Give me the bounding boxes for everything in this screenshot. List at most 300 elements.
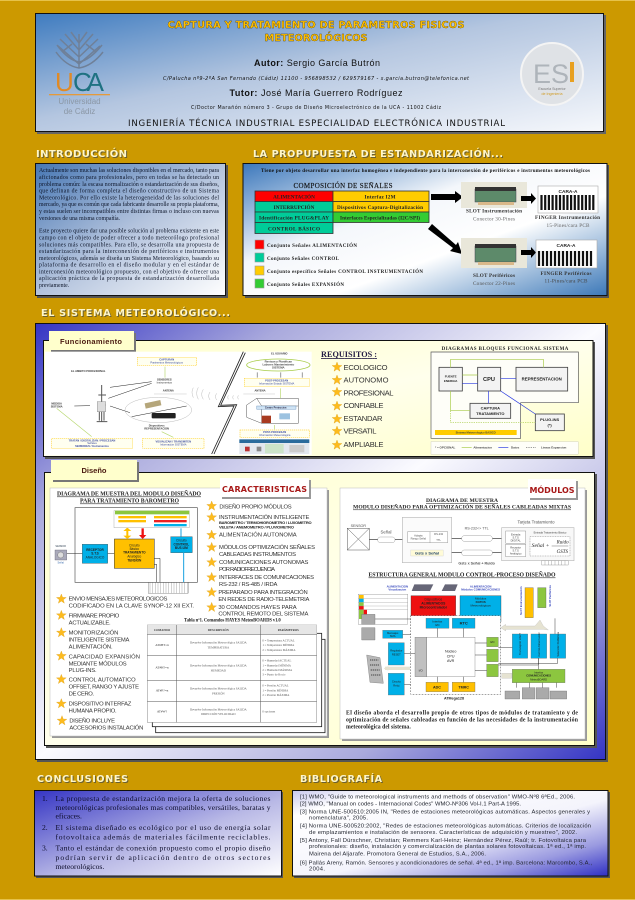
mixed signal diagram: Señal Generada — [411, 545, 443, 550]
signal legend: Conjunto Señales EXPANSIÓN — [267, 282, 344, 288]
barometer heading — [57, 490, 201, 504]
tower and arrows — [97, 385, 107, 422]
panel: bibliografía: [3] Norma UNE-500510:2005 IN, "Redes de estaciones meteorológicas automáticas. Aspectos generales y — [300, 810, 590, 816]
characteristics list: PREPARADO PARA INTEGRACIÓN — [218, 589, 308, 596]
signal composition table: Dispositivos Captura-Digitalización — [337, 205, 423, 211]
table: comandos hayes: 2 = Temperatura MÁXIMA — [262, 647, 296, 652]
barometer diagram: Señal — [57, 562, 64, 565]
diagram: system operation: MEDIDA — [51, 401, 62, 405]
table: comandos hayes: 1 = Humedad MÍNIMA — [262, 662, 292, 667]
title: METEOROLÓGICOS — [264, 31, 368, 44]
callout: características: CARACTERISTICAS — [222, 485, 307, 494]
icon: ESI logo: Escuela Superior — [538, 87, 566, 91]
signal legend — [255, 240, 423, 288]
table: comandos hayes — [147, 618, 325, 733]
connector captions: 15-Pines/cara PCB — [546, 223, 590, 229]
panel: propuesta de estandarización — [243, 164, 609, 298]
panel: funcionamiento — [44, 331, 595, 459]
block diagram: FUENTE — [445, 375, 457, 379]
diagram: system operation: Información Estado SISTEMA — [259, 382, 295, 386]
diagram: control module core: Selección Periféricos — [556, 631, 560, 657]
features list: HUMANA PROPIO. — [69, 709, 117, 715]
author details: C/Doctor Marañón número 3 - Grupo de Diseño Microelectrónico de la UCA - 11002 Cádiz — [191, 104, 441, 111]
table: comandos hayes: 0 = Humedad ACTUAL — [262, 659, 291, 663]
diagram: control module core: Núcleo — [445, 650, 456, 654]
table: comandos hayes: DESCRIPCIÓN — [208, 627, 230, 632]
author details: Autor: Sergio García Butrón — [254, 58, 380, 68]
block diagram: REPRESENTACION — [522, 376, 562, 381]
diagram: system operation: Labores Mantenimiento — [262, 362, 294, 366]
callout: módulos: MÓDULOS — [530, 484, 575, 495]
signal composition table: Identificación PLUG&PLAY — [259, 216, 329, 222]
callout: características — [220, 478, 311, 499]
tab: diseño — [51, 460, 139, 482]
panel: introducción: plataforma de desarrollo en el diseño modular y en el estándar de — [39, 262, 219, 268]
characteristics list — [207, 501, 315, 618]
mixed signal diagram: GSTS — [557, 550, 569, 555]
panel: conclusiones: 2. — [42, 823, 48, 832]
panel: conclusiones: podrían servir de aplicación dentro de otros sectores — [56, 853, 271, 862]
panel: introducción: campo con el objeto de poder ofrecer a todo meteorólogo profesional — [39, 234, 219, 242]
table: comandos hayes: Devuelve Información Meteorológica SALIDA — [190, 641, 248, 645]
mixed signal diagram: Entrada Tratamiento Básico — [534, 531, 567, 535]
panel: bibliografía: [1] WMO, "Guide to meteorological instruments and methods of observation" WMO-Nº8 6ªEd., 2006. — [300, 794, 575, 800]
characteristics list: 30 COMANDOS HAYES PARA — [218, 605, 297, 611]
icon: instrumentation slot — [461, 182, 527, 208]
characteristics list: MÓDULOS OPTIMIZACIÓN SEÑALES — [219, 544, 315, 551]
features list: ALIMENTACIÓN. — [69, 643, 113, 650]
panel: bibliografía — [292, 790, 610, 878]
requisitos list: PROFESIONAL — [344, 388, 394, 398]
arrow: to instrumentation slot — [431, 191, 463, 203]
intro sentence: Tiene por objeto desarrollar una interfaz homogénea e independiente para la interconexión de periféricos e instrumentos meteorológicos — [261, 169, 590, 174]
signal composition table: INTERRUPCIÓN — [274, 203, 315, 211]
title — [168, 20, 464, 44]
arrow: to peripheral slot — [428, 224, 462, 254]
mixed signal diagram: Señal + — [532, 543, 550, 549]
block diagram: CAPTURA — [481, 405, 500, 410]
block diagram: TRATAMIENTO — [476, 411, 505, 416]
degree line: INGENIERÍA TÉCNICA INDUSTRIAL ESPECIALIDAD ELECTRÓNICA INDUSTRIAL — [128, 117, 505, 129]
panel: conclusiones: 3. — [42, 844, 48, 852]
yellow dashed info boxes — [52, 357, 309, 448]
mixed signal diagram: Tarjeta Tratamiento — [517, 520, 555, 525]
panel: bibliografía: Mairena del Aljarafe. Promotora General de Estudios, S.A., 2006. — [309, 852, 486, 858]
module description: El diseño aborda el desarrollo propio de otros tipos de módulos de tratamiento y de — [346, 710, 578, 716]
mixed signal diagram: RS-232<> TTL — [465, 527, 489, 531]
barometer diagram: Circuito — [129, 543, 140, 547]
characteristics list: INSTRUMENTACIÓN INTELIGENTE — [219, 514, 309, 521]
mixed signal diagram: TTL — [436, 538, 442, 542]
diagram: system operation: SISTEMA — [272, 365, 285, 369]
requisitos list: CONFIABLE — [344, 401, 384, 410]
characteristics list: BAROMETRO / TERMOHIGROMETRO / LUXOMETRO — [219, 520, 312, 525]
panel: introducción: versiones de una misma compañía. — [39, 216, 121, 222]
table: comandos hayes: 2 = Presión MÁXIMA — [262, 692, 290, 697]
table: comandos hayes: TEMPERATURA — [207, 645, 230, 649]
features list: ACCESORIOS INSTALACIÓN — [69, 725, 143, 732]
features list: INTELIGENTE SISTEMA — [69, 637, 129, 643]
heading: bibliografía: BIBLIOGRAFÍA — [300, 772, 383, 785]
panel: bibliografía: profesionales: diseño, instalación y comercialización de plantas solares fotovoltaicas. 1ª ed., 1ª imp. — [309, 843, 586, 850]
table: comandos hayes: PRESIÓN — [212, 690, 225, 695]
diagram: control module core: Regulador — [390, 649, 403, 653]
mixed signal diagram: S.T.S — [512, 536, 519, 540]
panel: conclusiones: La propuesta de estandarización mejora la oferta de soluciones — [56, 794, 271, 803]
diagram: control module upper: DATOS — [476, 600, 486, 604]
table: comandos hayes: Devuelve Información Meteorológica SALIDA — [190, 687, 248, 691]
diagram: control module core: COMUNICACIONES — [526, 674, 551, 678]
diagram: control module upper — [358, 584, 552, 626]
panel: introducción: previamente. — [39, 283, 70, 289]
diagram: control module core: CPU — [447, 654, 455, 658]
diagram: control module core: AVR — [447, 659, 455, 663]
mixed signal diagram: RS-232 — [434, 532, 444, 536]
mixed signal diagram — [347, 517, 574, 565]
features list: DE CERO. — [69, 692, 94, 698]
panel: bibliografía: de emplazamientos e instalación de sensores. Características de adquisición y muestreo", 2002. — [309, 830, 577, 836]
panel: bibliografía: [4] Norma UNE-500520:2002, "Redes de estaciones meteorológicas automáticas. Criterios de localización — [300, 824, 591, 830]
diagram: system operation: Información Meteorológica — [259, 433, 291, 437]
signal composition table: COMPOSICIÓN DE SEÑALES — [294, 182, 393, 190]
diagram: control module upper: SLOT Periféricos — [548, 585, 552, 607]
diagram: control module core: Reloj — [393, 683, 400, 687]
table: comandos hayes: HUMEDAD — [211, 668, 227, 672]
panel: diseño — [44, 460, 597, 748]
block diagram: Lineas Expansion — [541, 446, 567, 450]
barometer diagram: SENSOR — [55, 545, 66, 548]
panel: bibliografía: [6] Pallás Areny, Ramón. Sensores y acondicionadores de señal. 4ª ed., 1ª imp. Barcelona: Marcombo, S.A., — [300, 860, 592, 866]
diagram: system operation: SENSORES — [157, 378, 172, 382]
features list: DISEÑO INCLUYE — [69, 718, 115, 725]
table: comandos hayes: AT#H?=n — [155, 666, 169, 670]
signal composition table: Interfaz I2M — [364, 194, 396, 200]
block diagram — [431, 347, 578, 454]
data outputs — [239, 439, 309, 443]
table: comandos hayes: Devuelve Información Meteorológica SALIDA — [190, 707, 248, 711]
módulos heading — [353, 498, 571, 510]
panel: introducción: problema común: la escasa normalización o estandarización de sus diseños, — [39, 182, 220, 188]
barometer diagram: Analógico — [127, 554, 142, 558]
barometer heading: DIAGRAMA DE MUESTRA DEL MODULO DISEÑADO — [57, 490, 201, 498]
mixed signal diagram: Señal — [380, 530, 392, 535]
diagram: system operation: ANTENA — [163, 388, 174, 392]
table: comandos hayes: Tabla nº1. Comandos HAYES MeteoBOARDS v1.0 — [184, 618, 281, 624]
diagram: control module core: RESET — [392, 653, 401, 657]
diagram: system operation: POST-PROCESAN — [263, 430, 286, 434]
panel: introducción: soluciones más compatibles. Para ello, se desarrolla una propuesta de — [39, 242, 219, 248]
icon: UCA logo: Universidad — [58, 97, 101, 106]
characteristics list: VELETA / ANEMOMETRO / PLUVIOMETRO — [219, 525, 294, 530]
panel: conclusiones: El sistema diseñado es ecológico por el uso de energía solar — [56, 823, 271, 832]
characteristics list: COMUNICACIONES AUTONOMAS — [219, 560, 308, 566]
block diagram: Sistema Meteorologico BASICO — [456, 431, 496, 435]
features list — [56, 594, 194, 732]
barometer diagram: TENSION — [127, 559, 142, 563]
diagram: control module upper: ALIMENTACION — [470, 584, 491, 588]
diagram: system operation: VISUALIZAN / TRANSMITEN — [156, 439, 191, 443]
barometer diagram: S.T.S — [91, 552, 99, 556]
diagram: control module upper: Dispositivos — [424, 597, 443, 601]
features list: ENVIO MENSAJES METEOROLOGICOS — [69, 597, 167, 603]
features list: FIRMWARE PROPIO — [69, 613, 120, 619]
table: comandos hayes: DIRECCIÓN VELOCIDAD — [201, 711, 236, 716]
heading: la propuesta: LA PROPUPUESTA DE ESTANDARIZACIÓN... — [253, 147, 503, 160]
panel: sistema meteorológico — [36, 324, 608, 762]
icon: ESI logo — [521, 43, 583, 105]
diagram: control module upper: SLOT Instrumentación — [519, 586, 523, 615]
diagram: system operation: ANTENA — [254, 388, 266, 392]
characteristics list: POR RADIOFRECUENCIA — [219, 567, 275, 573]
characteristics list: RS-232 / RS-485 / IRDA — [219, 582, 277, 588]
módulos heading: MODULO DISEÑADO PARA OPTIMIZACIÓN DE SEÑALES CABLEADAS MIXTAS — [353, 502, 571, 510]
diagram: system operation — [45, 352, 312, 455]
diagram: control module core: Interfaz — [534, 670, 544, 674]
mixed signal diagram: Modulo S.T.S — [414, 521, 440, 526]
icon: finger peripherals — [536, 240, 597, 268]
author details: C/Palucha nº9-2ºA San Fernando (Cádiz) 11100 - 956898532 / 629579167 - s.garcia.butron@telefonica.net — [163, 75, 470, 82]
mixed signal diagram: Entrada — [511, 533, 521, 537]
diagram: control module upper: Microcontrolador — [420, 605, 448, 609]
callout: módulos — [528, 479, 578, 500]
diagram: system operation: Información SISTEMA — [160, 443, 187, 447]
panel: bibliografía: 2004. — [309, 866, 325, 872]
icon: ESI logo: ES — [533, 59, 569, 89]
table: comandos hayes: PARÁMETROS — [278, 627, 299, 632]
panel: introducción: aficionados como para profesionales, pero en todas se ha detectado un — [39, 174, 219, 181]
diagram: control module upper: ALIMENTADOS — [421, 601, 446, 605]
icon: finger instrumentation: CARA-A — [559, 189, 578, 195]
panel: bibliografía: nomenclatura", 2005. — [309, 816, 368, 822]
requisitos list: VERSATIL — [344, 426, 376, 436]
barometer diagram: ANALOGICO — [86, 555, 105, 559]
diagram: system operation: Revisan y Planifican — [265, 359, 292, 363]
barometer diagram: RECEPTOR — [86, 548, 104, 552]
author details — [163, 58, 470, 111]
block diagram: DIAGRAMAS BLOQUES FUNCIONAL SISTEMA — [442, 347, 569, 352]
requisitos list: AMPLIABLE — [344, 440, 384, 449]
panel: conclusiones: fotovoltaica además de materiales fácilmente reciclables. — [56, 832, 271, 841]
diagram: control module upper: Módulos COMUNICACIONES — [461, 587, 500, 591]
diagram: control module upper: Módulos — [475, 596, 487, 600]
signal composition table: CONTROL BÁSICO — [268, 224, 320, 232]
diagram: system operation: REPRESENTACION — [144, 426, 169, 430]
diagram: system operation: CAPTURAN — [159, 358, 174, 362]
characteristics list: INTERFACES DE COMUNICACIONES — [219, 575, 314, 581]
barometer heading: PARA TRATAMIENTO BAROMETRO — [80, 498, 179, 504]
sheet: barometer module — [50, 488, 329, 738]
requisitos list: ESTANDAR — [344, 414, 383, 423]
title: CAPTURA Y TRATAMIENTO DE PARAMETROS FISICOS — [168, 20, 464, 31]
panel: conclusiones: meteorológicos. — [56, 862, 104, 871]
arrow: slot to finger bottom — [521, 247, 536, 258]
signal composition table: ALIMENTACIÓN — [273, 192, 315, 200]
panel: introducción: meteorológicos, además se diseña un Sistema Meteorológico, basando su — [39, 256, 219, 262]
mixed signal diagram: Analógico — [510, 551, 522, 555]
heading: estructura general: ESTRUCTURA GENERAL MODULO CONTROL-PROCESO DISEÑADO — [368, 570, 556, 578]
barometer diagram — [55, 508, 197, 593]
diagram: control module core: MeteoBOARD — [530, 677, 547, 681]
signal composition table: Interfaces Especializadas (I2C/SPI) — [340, 214, 420, 222]
tab: diseño: Diseño — [81, 466, 107, 475]
mixed signal diagram: Rango Señal — [411, 537, 426, 541]
módulos heading: DIAGRAMA DE MUESTRA — [426, 498, 498, 504]
icon: ESI logo: de Ingeniería — [542, 92, 562, 96]
heading: el sistema meteorológico: EL SISTEMA METEOROLÓGICO... — [41, 306, 230, 319]
arrow: slot to finger top — [521, 193, 536, 204]
panel: conclusiones: 1. — [42, 794, 48, 803]
icon: UCA logo: U — [55, 67, 74, 97]
table: comandos hayes: 0 opciones — [262, 709, 276, 713]
diagram: system operation: Centro Proteccion — [265, 407, 287, 410]
table: comandos hayes: 1 = Presión MÍNIMA — [262, 687, 289, 692]
connector captions — [466, 208, 600, 287]
features list: CAPACIDAD EXPANSIÓN — [69, 653, 140, 660]
requisitos list: REQUISITOS : — [321, 350, 377, 359]
signal composition table — [255, 182, 429, 234]
module description: meteorológica del sistema. — [346, 724, 411, 730]
requisitos list — [321, 350, 394, 449]
characteristics list: DISEÑO PROPIO MÓDULOS — [219, 503, 292, 510]
characteristics list: ALIMENTACIÓN AUTONOMA — [219, 532, 297, 539]
header panel — [36, 14, 606, 134]
author details: Tutor: José María Guerrero Rodríguez — [230, 88, 403, 98]
diagram: system operation: Dispositivos — [149, 424, 165, 428]
table: comandos hayes: AT#P?=n — [156, 689, 169, 693]
diagram: system operation: Instrumentos — [157, 380, 173, 384]
sheet: módulos — [340, 488, 587, 741]
features list: OFFSET, RANGO Y AJUSTE — [69, 685, 139, 691]
panel: conclusiones: eficaces. — [56, 812, 82, 821]
diagram: control module core: Interfaz — [432, 619, 443, 623]
table: comandos hayes: 0 = Presión ACTUAL — [262, 684, 289, 688]
module description: optimización de señales cableadas en función de las necesidades de la instrumentación — [346, 718, 579, 724]
features list: CONTROL AUTOMATICO — [69, 678, 136, 684]
diagram: system operation: EL AMBITO PROFESIONAL — [71, 369, 106, 373]
icon: UCA logo: CA — [73, 67, 105, 97]
user ellipse — [247, 359, 310, 371]
features list: CODIFICADO EN LA CLAVE SYNOP-12 XII EXT. — [69, 604, 194, 610]
diagram: control module core — [362, 614, 567, 700]
block diagram: CPU — [483, 377, 495, 383]
diagram: control module core: ATMega128 — [444, 696, 464, 700]
diagram: control module core: I2C — [490, 640, 495, 644]
diagram: control module core: SMA — [390, 634, 396, 638]
heading: conclusiones: CONCLUSIONES — [37, 774, 128, 785]
barometer diagram: TRATAMIENTO — [123, 551, 146, 555]
block diagram: (*) — [548, 423, 552, 428]
diagram: control module core: Circuito — [392, 679, 401, 683]
table: comandos hayes: COMANDO — [154, 628, 171, 632]
diagram: control module upper: ALIMENTACION — [387, 585, 408, 589]
panel: conclusiones: meteorológicas profesionales mas compatibles, versátiles, baratas y — [56, 803, 271, 812]
mixed signal diagram: SENSOR — [351, 524, 366, 528]
diagram: control module core: Mensajes — [387, 631, 399, 635]
panel: conclusiones: Tanto el estándar de conexión propuesto como el propio diseño — [56, 844, 271, 852]
barometer diagram: BUS I2M — [175, 546, 188, 550]
diagram: control module core: ADC — [433, 685, 441, 689]
panel: introducción — [36, 164, 228, 298]
panel: introducción: estandarización para la interconexión de periféricos e instrumentos — [39, 248, 220, 255]
diagram: system operation: Señales — [87, 441, 97, 445]
signal legend: Conjunto Señales ALIMENTACIÓN — [267, 243, 357, 249]
connector captions: Conector 30-Pines — [473, 216, 515, 222]
panel: introducción: y estas suelen ser incompatibles entre distintas firmas o incluso con nuevas — [39, 208, 220, 215]
panel: conclusiones — [34, 790, 283, 878]
diagram: system operation: Parámetros Meteorológicos — [150, 361, 184, 365]
diagram: control module core: TMRC — [458, 685, 469, 689]
panel: introducción: interconexión meteorológico propuesto, con el objetivo de ofrecer una — [39, 268, 219, 275]
panel: introducción: Actualmente son muchas las soluciones disponibles en el mercado, tanto para — [39, 168, 219, 174]
mixed signal diagram: Adapta — [414, 534, 423, 538]
tab: funcionamiento — [49, 331, 136, 352]
panel: introducción: Este proyecto quiere dar una posible solución al problema existente en este — [39, 228, 219, 234]
barometer diagram: Básico — [130, 547, 139, 551]
panel: bibliografía: [5] Antony, Fall Dürschner, Christian; Remmers Karl-Heinz; Hernández Pérez, Raúl; tr. Fotovoltaica para — [300, 838, 587, 844]
mixed signal diagram: Gsts x Señal + Ruido — [458, 561, 496, 565]
features list: ACTUALIZABLE. — [69, 620, 111, 626]
features list: PLUG-INS. — [69, 668, 97, 674]
block diagram: Alimentacion — [473, 446, 492, 450]
characteristics list: CONTROL REMOTO DEL SISTEMA — [218, 612, 308, 618]
diagram: control module upper: Visualizacion — [388, 588, 407, 592]
panel: introducción: aplicación práctica de la propuesta de estandarización desarrollada — [39, 276, 219, 282]
barometer diagram: CONTROL — [174, 542, 189, 546]
connector captions: Conector 22-Pines — [473, 281, 515, 287]
mixed signal diagram: Receptor — [510, 545, 521, 549]
icon: UCA logo: de Cádiz — [64, 107, 95, 116]
signal legend: Conjunto Señales CONTROL — [267, 257, 340, 262]
connector captions: 11-Pines/cara PCB — [544, 278, 588, 284]
mixed signal diagram: DIGITAL — [511, 539, 521, 543]
diagram: control module core: RTC — [460, 621, 468, 626]
connector captions: FINGER Instrumentación — [535, 215, 600, 221]
central station house — [247, 398, 298, 423]
features list: MONITORIZACIÓN — [69, 630, 118, 637]
characteristics list: CABLEADAS INSTRUMENTOS — [219, 552, 296, 558]
diagram: control module core: I/O — [419, 669, 423, 673]
features list: MEDIANTE MÓDULOS — [69, 660, 127, 667]
module description — [346, 710, 579, 730]
block diagram: ENERGIA — [444, 379, 458, 383]
diagram: control module core: I2C — [435, 623, 440, 627]
panel: introducción: mercado, ya que es común que cada fabricante desarrolle su propia plataforma, — [39, 201, 220, 208]
diagram: system operation: TRATAN / DIGITALIZAN / PROCESAN — [69, 438, 115, 442]
icon: finger peripherals: CARA-A — [557, 243, 576, 249]
requisitos list: ECOLOGICO — [344, 363, 388, 372]
panel: bibliografía: [2] WMO, "Manual on codes - Internacional Codes" WMO-Nº306 Vol-I.1 Part-A 1995. — [300, 800, 521, 808]
diagram: control module core: Transceptor UART — [518, 633, 522, 655]
connector captions: SLOT Instrumentación — [466, 208, 522, 214]
table: comandos hayes: Devuelve Información Meteorológica SALIDA — [190, 664, 248, 668]
diagram: system operation: SISTEMA — [51, 404, 63, 408]
block diagram: PLUG-INS — [540, 417, 560, 422]
icon: UCA logo — [49, 32, 110, 116]
tab: funcionamiento: Funcionamiento — [60, 337, 122, 346]
lightning divider — [212, 352, 245, 454]
characteristics list: EN REDES DE RADIO-TELEMETRIA — [218, 597, 309, 603]
connector captions: FINGER Periféricos — [540, 271, 592, 277]
mixed signal diagram: Ruido — [556, 541, 569, 546]
features list: DISPOSITIVO INTERFAZ — [69, 702, 132, 708]
panel: introducción: que definan de forma completa el diseño constructivo de un Sistema — [39, 188, 219, 194]
panel: introducción: Meteorológico. Por ello existe la heterogeneidad de las soluciones del — [39, 195, 219, 201]
table: comandos hayes: 3 = Punto de Rocío — [262, 673, 286, 677]
table: comandos hayes: 0 = Temperatura ACTUAL — [262, 638, 295, 642]
heading: introducción: INTRODUCCIÓN — [36, 147, 127, 160]
mixed signal diagram: S.T.S — [512, 548, 519, 552]
diagram: system operation: SENSORES / Instrumentos — [75, 444, 109, 448]
